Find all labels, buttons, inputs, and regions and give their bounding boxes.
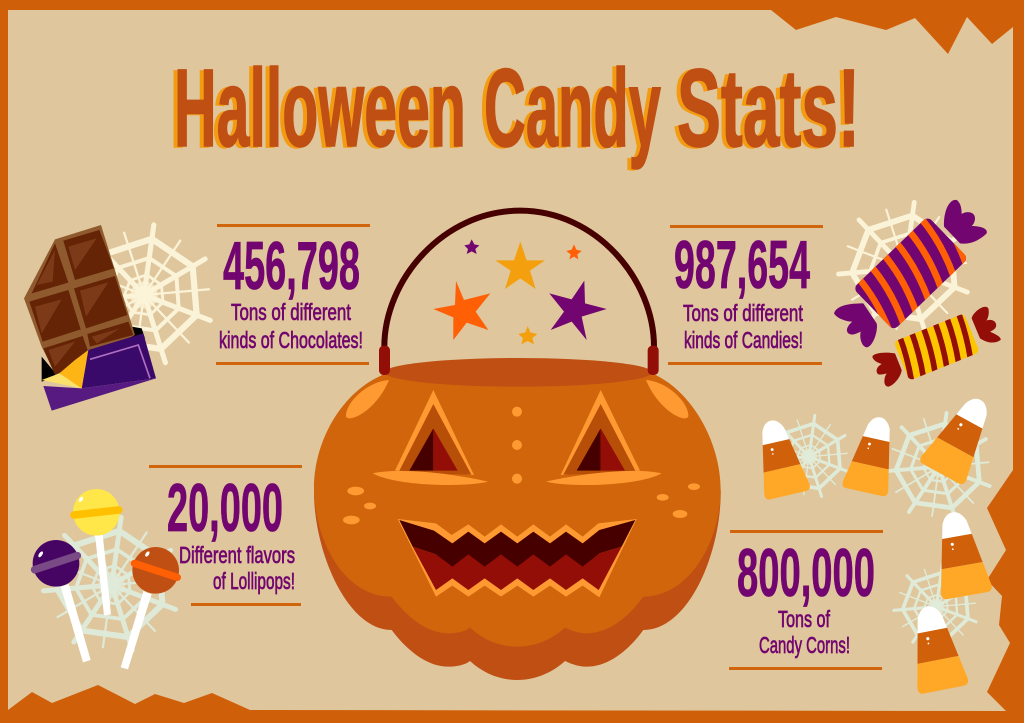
spider web (66, 215, 222, 369)
title: Stats! (673, 48, 856, 171)
bucket handle (384, 211, 654, 347)
stars (433, 239, 607, 344)
pumpkin back shadow (314, 490, 721, 680)
yellow lollipop (73, 489, 120, 615)
stat: candies: kinds of Candies! (684, 327, 803, 353)
stat: lollipops (149, 465, 302, 606)
left eye (373, 390, 488, 485)
lollipops illustration (33, 489, 187, 669)
spider web (37, 508, 187, 657)
title: Halloween (174, 47, 466, 170)
title: Stats! (677, 47, 860, 170)
mouth (398, 519, 637, 597)
stat: chocolates: Tons of different (231, 299, 351, 325)
chocolate illustration (24, 215, 222, 411)
purple wrapper (42, 333, 156, 411)
stat: chocolates: kinds of Chocolates! (219, 327, 363, 353)
pumpkin body (314, 374, 721, 647)
small striped candy (872, 307, 1001, 387)
spider webs (763, 406, 999, 651)
pumpkin candy bucket (314, 211, 721, 680)
stat: candy corns: Candy Corns! (759, 632, 850, 658)
spider web (832, 193, 979, 338)
stat: candy corns: 800,000 (737, 535, 875, 611)
candy illustration (832, 193, 1001, 387)
chocolate bar (24, 225, 145, 382)
stat: candy corns: Tons of (778, 606, 830, 632)
candy corns (746, 385, 1006, 696)
stat: chocolates (216, 224, 370, 365)
stat: candy corns (729, 530, 883, 670)
handle clips (379, 346, 659, 375)
bucket rim (384, 358, 652, 387)
pumpkin highlights (343, 380, 700, 524)
stat: lollipops: of Lollipops! (213, 568, 295, 594)
title: Halloween (170, 48, 462, 171)
large striped candy (834, 200, 987, 347)
candy corn illustration (746, 385, 1006, 696)
orange lollipop (121, 547, 179, 669)
right eye (546, 390, 662, 485)
title: Candy (484, 47, 661, 170)
stat: candies: 987,654 (674, 227, 810, 303)
stat: lollipops: 20,000 (167, 470, 283, 546)
title: Candy (480, 48, 657, 171)
stat: candies: Tons of different (683, 300, 803, 326)
stat: candies (668, 225, 823, 365)
purple lollipop (33, 540, 91, 662)
stat: lollipops: Different flavors (179, 542, 295, 568)
stat: chocolates: 456,798 (223, 228, 360, 304)
